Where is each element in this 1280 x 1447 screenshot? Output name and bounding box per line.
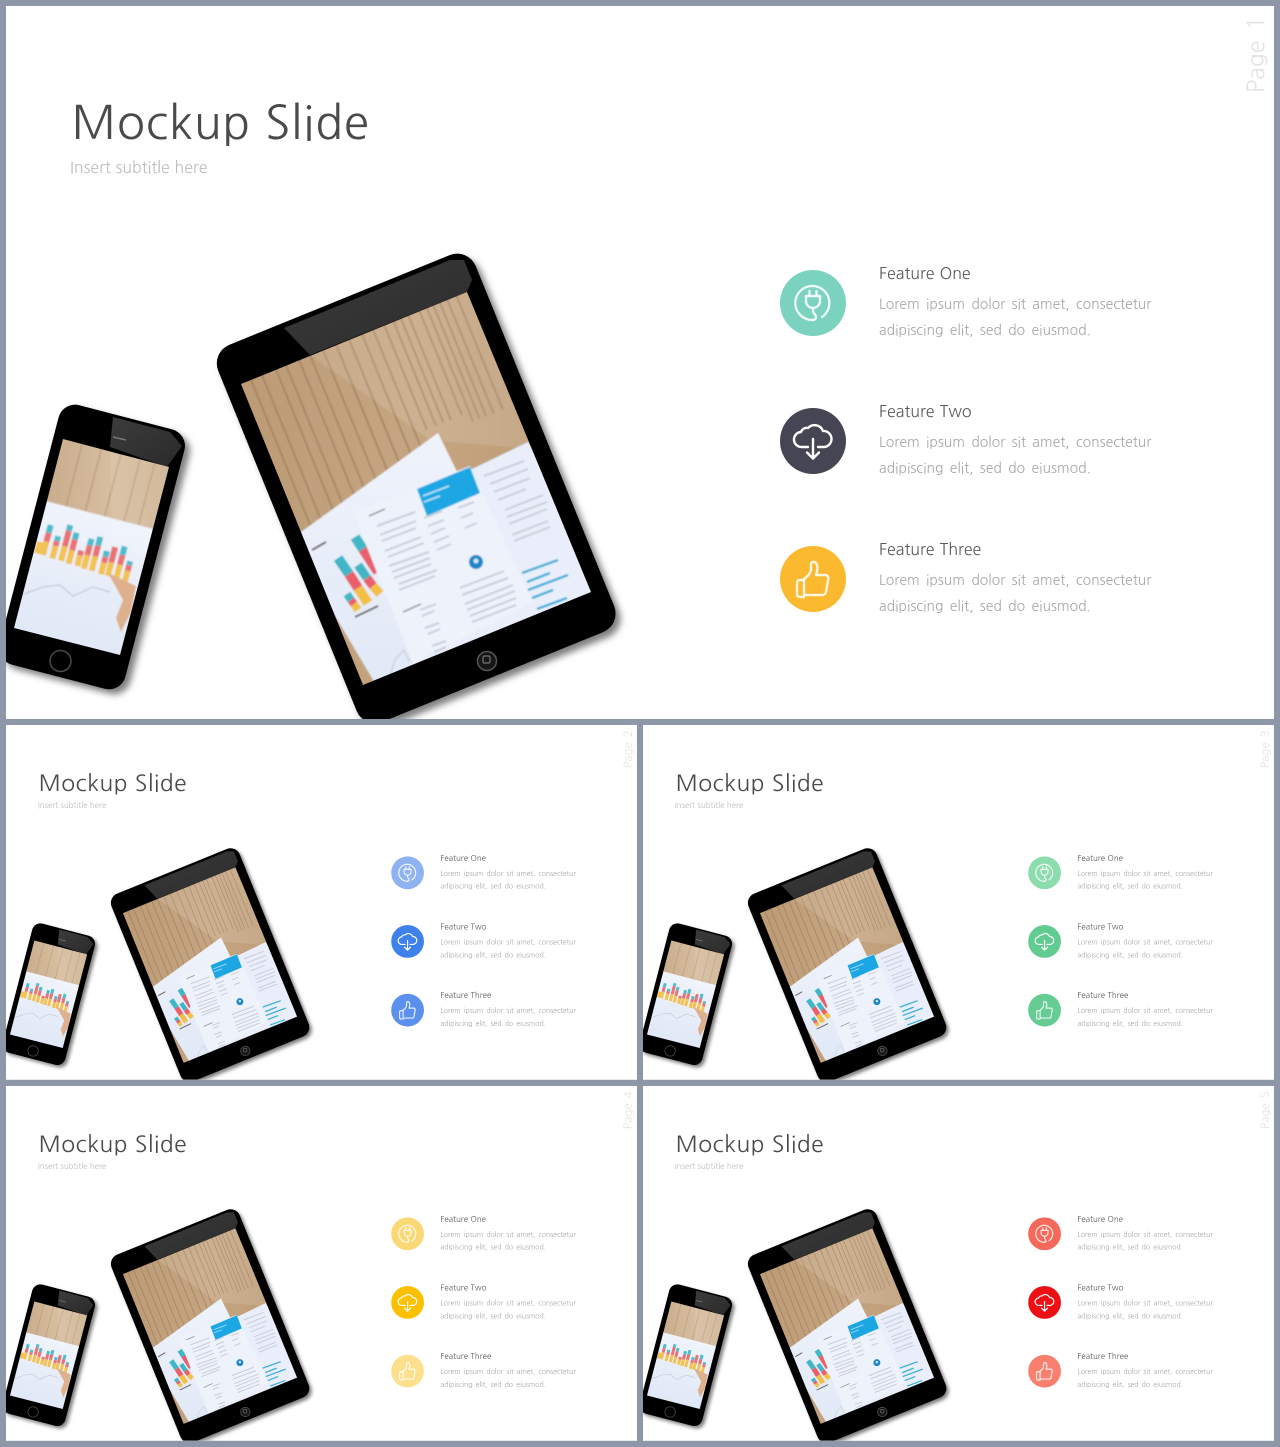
icon: cloud download [391, 925, 424, 958]
feature two body: adipiscing elit, sed do eiusmod. [440, 952, 546, 959]
feature one body: adipiscing elit, sed do eiusmod. [440, 1244, 546, 1251]
feature two body: Lorem ipsum dolor sit amet, consectetur [440, 939, 576, 946]
feature three body: adipiscing elit, sed do eiusmod. [879, 600, 1091, 614]
feature two body: adipiscing elit, sed do eiusmod. [1077, 952, 1183, 959]
feature three body [1077, 1366, 1213, 1392]
title: Mockup Slide [39, 1133, 187, 1156]
feature three body [440, 1007, 576, 1028]
feature three [391, 992, 576, 1028]
feature one [1028, 1215, 1227, 1255]
feature two body [440, 938, 576, 959]
feature one body: Lorem ipsum dolor sit amet, consectetur [1077, 1231, 1213, 1238]
feature three [1028, 1352, 1227, 1392]
title: Mockup Slide [676, 1133, 824, 1156]
feature three body: Lorem ipsum dolor sit amet, consectetur [440, 1008, 576, 1015]
feature one heading: Feature One [1077, 854, 1123, 862]
feature two body: adipiscing elit, sed do eiusmod. [440, 1313, 546, 1320]
feature one heading: Feature One [1077, 1215, 1123, 1223]
panel: slide 2 blue [6, 725, 637, 1080]
subtitle: Insert subtitle here [70, 160, 207, 176]
icon: plug [391, 856, 424, 890]
feature one body: Lorem ipsum dolor sit amet, consectetur [440, 1231, 576, 1238]
feature two body [1077, 1297, 1213, 1323]
title: Mockup Slide [39, 772, 187, 795]
page label: Page 5 [1260, 1091, 1271, 1129]
panel: slide 5 red [643, 1086, 1274, 1441]
icon: thumbs up [391, 994, 424, 1026]
feature one body [440, 1231, 576, 1251]
feature two heading: Feature Two [440, 923, 486, 931]
feature three body: adipiscing elit, sed do eiusmod. [1077, 1021, 1183, 1028]
feature one [780, 266, 1152, 338]
feature three body: Lorem ipsum dolor sit amet, consectetur [1077, 1008, 1213, 1015]
feature one heading: Feature One [440, 1215, 486, 1223]
feature three heading: Feature Three [440, 992, 491, 1000]
feature two body: Lorem ipsum dolor sit amet, consectetur [1077, 939, 1213, 946]
feature one body: adipiscing elit, sed do eiusmod. [1077, 883, 1183, 890]
feature one [391, 854, 576, 890]
feature one body: Lorem ipsum dolor sit amet, consectetur [879, 298, 1151, 312]
icon: plug [1028, 1217, 1061, 1250]
feature one body [1077, 870, 1213, 890]
feature two [1028, 1284, 1227, 1323]
feature two [391, 1284, 576, 1320]
feature one heading: Feature One [440, 854, 486, 862]
feature one heading: Feature One [879, 266, 971, 282]
feature one body [1077, 1228, 1213, 1254]
feature two [1028, 923, 1213, 959]
feature one body: adipiscing elit, sed do eiusmod. [879, 324, 1091, 338]
feature one body: adipiscing elit, sed do eiusmod. [1077, 1244, 1183, 1251]
feature three heading: Feature Three [879, 542, 981, 558]
device mockups [6, 848, 314, 1080]
feature two body: Lorem ipsum dolor sit amet, consectetur [1077, 1300, 1213, 1307]
feature one body: Lorem ipsum dolor sit amet, consectetur [1077, 870, 1213, 877]
feature one body [440, 870, 576, 890]
panel: slide 3 green [643, 725, 1274, 1080]
subtitle: Insert subtitle here [38, 802, 106, 810]
icon: plug [391, 1218, 424, 1250]
icon: cloud download [391, 1286, 424, 1319]
feature three [1028, 992, 1213, 1028]
icon: cloud download [1028, 1286, 1061, 1319]
feature two body: adipiscing elit, sed do eiusmod. [1077, 1313, 1183, 1320]
subtitle: Insert subtitle here [675, 1163, 743, 1171]
feature one body: adipiscing elit, sed do eiusmod. [440, 883, 546, 890]
icon: cloud download [780, 408, 846, 474]
feature three body: adipiscing elit, sed do eiusmod. [1077, 1382, 1183, 1389]
feature two heading: Feature Two [1077, 1284, 1123, 1292]
icon: thumbs up [391, 1354, 424, 1388]
feature three body: Lorem ipsum dolor sit amet, consectetur [1077, 1369, 1213, 1376]
feature three body [1077, 1007, 1213, 1028]
feature two heading: Feature Two [1077, 923, 1123, 931]
page label: Page 3 [1260, 730, 1271, 768]
icon: thumbs up [1028, 1355, 1061, 1388]
feature two body [879, 436, 1152, 476]
feature three [780, 542, 1152, 614]
page label: Page 1 [1245, 16, 1268, 93]
feature three body: Lorem ipsum dolor sit amet, consectetur [440, 1369, 576, 1376]
feature three heading: Feature Three [1077, 992, 1128, 1000]
feature two [780, 404, 1152, 476]
feature two body: adipiscing elit, sed do eiusmod. [879, 462, 1091, 476]
page label: Page 2 [623, 730, 634, 768]
feature three heading: Feature Three [440, 1353, 491, 1361]
feature three body: adipiscing elit, sed do eiusmod. [440, 1382, 546, 1389]
feature one [391, 1215, 576, 1251]
feature two [391, 923, 576, 959]
device mockups [643, 1209, 952, 1441]
device mockups: phone and tablet [6, 254, 626, 719]
device mockups [643, 848, 952, 1080]
feature three heading: Feature Three [1077, 1353, 1128, 1361]
page label: Page 4 [623, 1091, 634, 1129]
icon: plug [780, 270, 846, 336]
icon: thumbs up [780, 546, 846, 612]
icon: plug [1028, 856, 1061, 890]
feature three body [879, 574, 1152, 614]
feature two body: Lorem ipsum dolor sit amet, consectetur [440, 1300, 576, 1307]
icon: cloud download [1028, 925, 1061, 958]
feature one [1028, 854, 1213, 890]
panel: slide 1 large [6, 6, 1274, 719]
feature two heading: Feature Two [440, 1284, 486, 1292]
feature two body [440, 1300, 576, 1320]
subtitle: Insert subtitle here [675, 802, 743, 810]
feature one body: Lorem ipsum dolor sit amet, consectetur [440, 870, 576, 877]
icon: thumbs up [1028, 994, 1061, 1026]
panel: slide 4 yellow [6, 1086, 637, 1441]
feature three body: Lorem ipsum dolor sit amet, consectetur [879, 574, 1151, 588]
feature two body [1077, 938, 1213, 959]
subtitle: Insert subtitle here [38, 1163, 106, 1171]
feature one body [879, 298, 1152, 338]
feature three body: adipiscing elit, sed do eiusmod. [440, 1021, 546, 1028]
feature two body: Lorem ipsum dolor sit amet, consectetur [879, 436, 1151, 450]
title: Mockup Slide [676, 772, 824, 795]
device mockups [6, 1209, 314, 1441]
feature two heading: Feature Two [879, 404, 972, 420]
feature three body [440, 1368, 576, 1389]
feature three [391, 1352, 576, 1389]
title: Mockup Slide [72, 100, 370, 146]
